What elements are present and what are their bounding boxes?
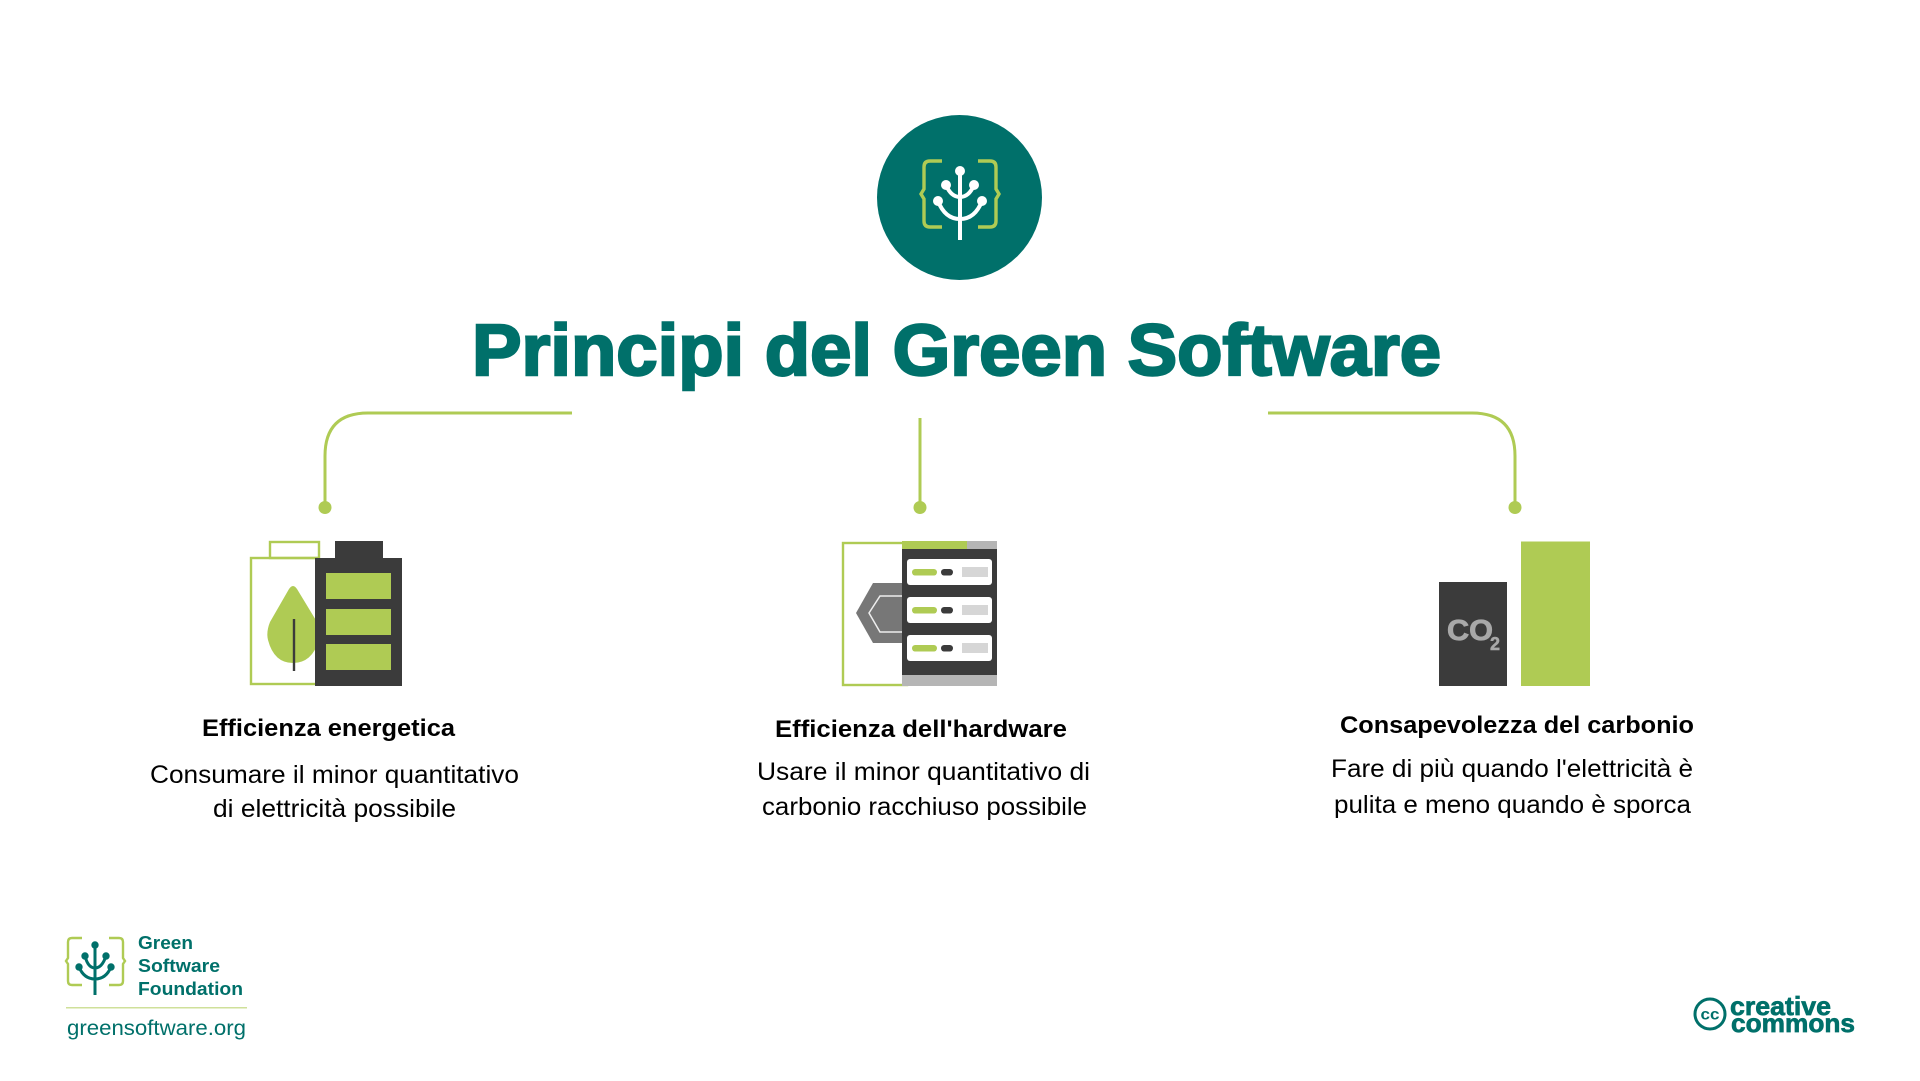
icon: small tree logo	[66, 938, 125, 995]
text block: carbon awareness: pulita e meno quando è sporca	[1334, 791, 1691, 819]
text block: hardware efficiency: Efficienza dell'hardware	[775, 716, 1067, 743]
icon: carbon bars: 2	[1490, 634, 1500, 654]
text block: carbon awareness: Consapevolezza del carbonio	[1340, 712, 1694, 739]
website: greensoftware.org	[67, 1017, 246, 1040]
connector: middle	[914, 418, 926, 514]
text block: energy efficiency	[150, 715, 519, 823]
connector: right	[1268, 413, 1522, 514]
text block: carbon awareness	[1331, 712, 1694, 819]
text block: energy efficiency: di elettricità possibile	[213, 795, 456, 823]
text block: hardware efficiency	[757, 716, 1090, 821]
text block: energy efficiency: Efficienza energetica	[202, 715, 456, 742]
logo: creative commons: cc	[1700, 1006, 1720, 1024]
logo: creative commons	[1695, 991, 1855, 1038]
icon: main circular logo	[877, 115, 1042, 280]
icon: server rack with hexagon	[843, 541, 997, 686]
text block: energy efficiency: Consumare il minor quantitativo	[150, 761, 519, 789]
title: Principi del Green Software	[472, 311, 1441, 391]
icon: carbon bars	[1439, 542, 1590, 686]
logo wordmark	[138, 933, 243, 999]
text block: hardware efficiency: Usare il minor quantitativo di	[757, 758, 1090, 786]
icon: battery with leaf	[251, 541, 402, 686]
logo: creative commons: creative	[1730, 991, 1831, 1021]
logo wordmark: Software	[138, 956, 220, 976]
text block: hardware efficiency: carbonio racchiuso possibile	[762, 793, 1087, 821]
icon: carbon bars: CO	[1447, 615, 1493, 647]
logo wordmark: Green	[138, 933, 193, 953]
logo wordmark: Foundation	[138, 979, 243, 999]
connector: left	[318, 413, 572, 514]
logo: Green Software Foundation	[66, 933, 247, 1040]
text block: carbon awareness: Fare di più quando l'elettricità è	[1331, 755, 1693, 783]
logo: creative commons: commons	[1731, 1008, 1855, 1038]
